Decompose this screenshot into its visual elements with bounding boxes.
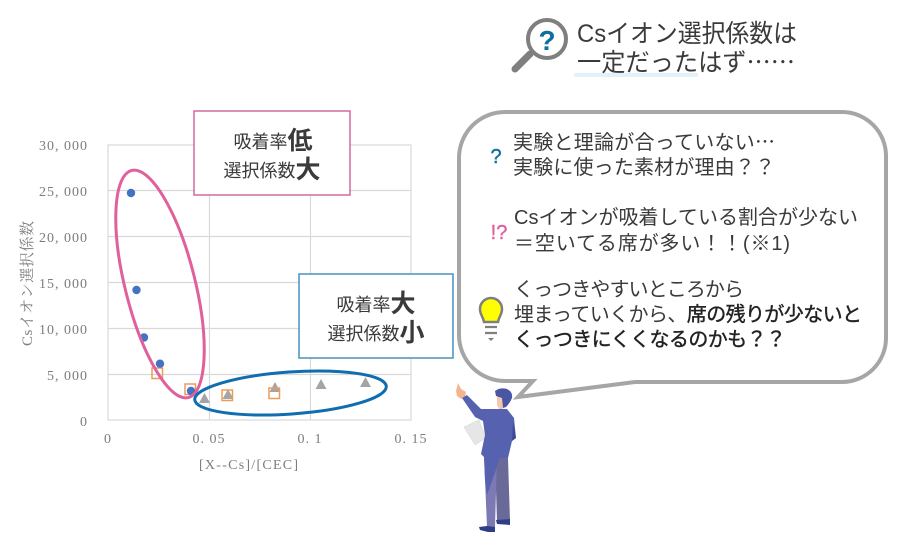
thought 2: ＝空いてる席が多い！！(※1)	[514, 232, 790, 255]
heading	[574, 20, 797, 79]
thought 3: 埋まっていくから、席の残りが少ないと	[514, 303, 862, 326]
scatter chart	[19, 139, 428, 473]
callout: high adsorption, low selectivity: 小	[399, 319, 425, 347]
x axis tick labels	[104, 432, 428, 447]
callout: high adsorption, low selectivity	[299, 274, 453, 358]
x axis tick labels: 0. 1	[298, 432, 322, 447]
icon: magnifying glass: ?	[538, 25, 556, 56]
icon: light bulb	[480, 298, 502, 341]
y axis tick labels: 10, 000	[39, 323, 88, 338]
thought 1: 実験と理論が合っていない…	[513, 126, 775, 155]
x axis title: [X--Cs]/[CEC]	[199, 458, 299, 473]
heading: Csイオン選択係数は	[577, 20, 797, 48]
icon: magnifying glass	[515, 20, 566, 69]
callout: low adsorption, high selectivity: 低	[287, 127, 313, 155]
face and neck	[497, 396, 503, 409]
thought 3: くっつきにくくなるのかも？？	[514, 329, 786, 351]
thought 1: 実験に使った素材が理由？？	[513, 156, 775, 179]
y axis tick labels	[39, 139, 88, 430]
x axis tick labels: 0	[104, 432, 112, 447]
callout: low adsorption, high selectivity: 吸着率	[233, 132, 287, 152]
callout: high adsorption, low selectivity: 吸着率	[336, 295, 390, 315]
series: circles	[127, 189, 195, 395]
x axis tick labels: 0. 05	[192, 432, 226, 447]
callout: high adsorption, low selectivity: 選択係数	[327, 324, 399, 344]
y axis title: Csイオン選択係数	[19, 220, 36, 346]
heading: 一定だったはず……	[577, 43, 795, 79]
callout: low adsorption, high selectivity	[194, 111, 350, 195]
thought 2	[491, 206, 858, 255]
callout: low adsorption, high selectivity: 選択係数	[223, 161, 295, 181]
speech bubble	[459, 112, 886, 397]
pink ellipse: low adsorption group	[98, 162, 222, 406]
series: triangles	[199, 377, 371, 403]
x axis tick labels: 0. 15	[394, 432, 428, 447]
icon: exclamation question: !?	[491, 222, 507, 244]
callout: high adsorption, low selectivity: 大	[390, 290, 416, 318]
jacket and arm	[462, 395, 516, 458]
hand	[456, 383, 466, 399]
thought 3: くっつきやすいところから	[514, 279, 744, 301]
thought 2: Csイオンが吸着している割合が少ない	[514, 206, 858, 229]
front leg	[484, 456, 497, 527]
callout: low adsorption, high selectivity: 大	[295, 156, 321, 184]
y axis tick labels: 30, 000	[39, 139, 88, 154]
document	[464, 420, 486, 445]
thought 1	[490, 126, 775, 179]
hair	[495, 388, 512, 408]
series: squares	[152, 368, 280, 400]
y axis tick labels: 0	[80, 415, 88, 430]
y axis tick labels: 25, 000	[39, 185, 88, 200]
y axis tick labels: 5, 000	[47, 369, 88, 384]
figure: businessman pointing at the bubble	[456, 383, 516, 532]
thought 3	[480, 279, 862, 351]
icon: question mark: ?	[490, 146, 502, 168]
back shoe	[496, 519, 510, 525]
y axis tick labels: 15, 000	[39, 277, 88, 292]
front shoe	[479, 526, 495, 532]
back leg	[495, 458, 510, 522]
y axis tick labels: 20, 000	[39, 231, 88, 246]
blue ellipse: high adsorption group	[193, 365, 388, 421]
